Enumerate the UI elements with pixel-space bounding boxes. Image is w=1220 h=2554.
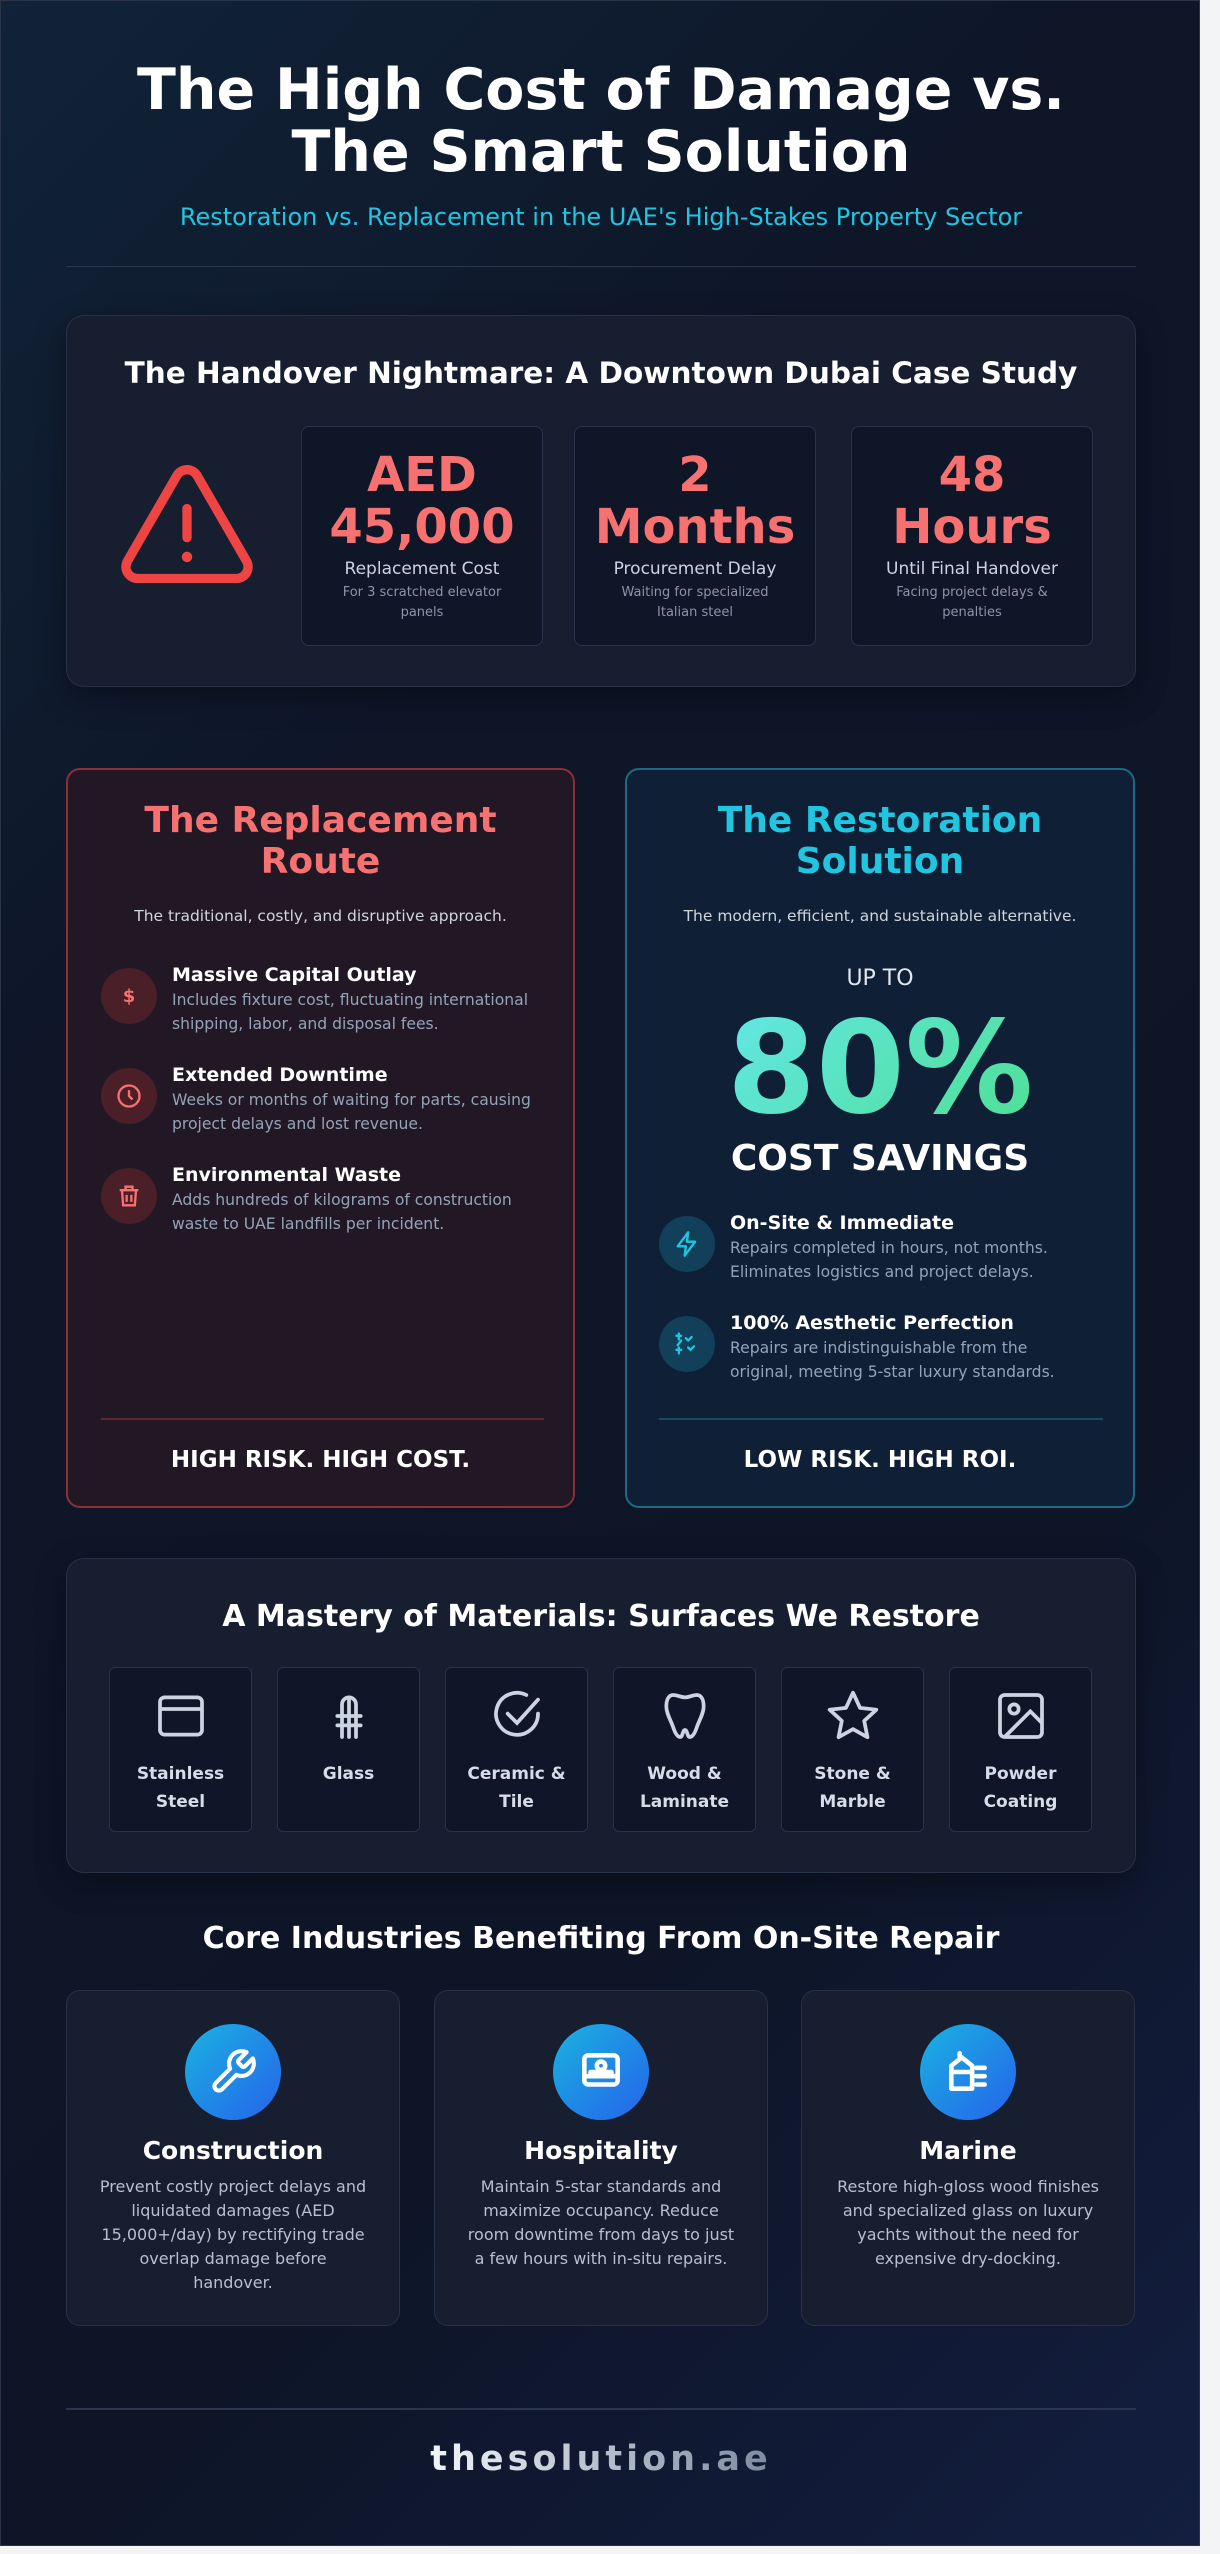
icon: warning: [121, 465, 253, 584]
stat: handover: 48: [939, 447, 1005, 503]
replacement heading: [144, 800, 497, 882]
item: on-site: Repairs completed in hours, not months. Eliminates logistics and project delays.: [730, 1239, 1048, 1281]
replacement footer: HIGH RISK. HIGH COST.: [171, 1447, 470, 1473]
restoration heading: [718, 800, 1042, 882]
panel: restoration solution: [625, 768, 1135, 1508]
stat: delay: 2: [678, 447, 712, 503]
stat: delay: Waiting for specialized Italian steel: [622, 585, 768, 620]
item: aesthetic: [659, 1312, 1055, 1381]
tile: powder coating: Coating: [984, 1792, 1057, 1812]
tile: stainless steel: Steel: [156, 1792, 205, 1812]
tile: stone: Stone &: [814, 1764, 891, 1784]
item: downtime: Extended Downtime: [172, 1064, 388, 1086]
tile: ceramic: [445, 1667, 588, 1832]
up to: UP TO: [846, 966, 914, 991]
stat: 80%: 80%: [727, 994, 1033, 1143]
tile: stone: Marble: [819, 1792, 886, 1812]
title: [137, 57, 1065, 185]
item: capital outlay: Massive Capital Outlay: [172, 964, 417, 986]
restoration heading: Solution: [796, 841, 964, 882]
item: capital outlay: [101, 964, 528, 1033]
card: construction: Construction: [143, 2136, 323, 2165]
item: aesthetic: 100% Aesthetic Perfection: [730, 1312, 1014, 1334]
item: downtime: [101, 1064, 531, 1133]
card: marine: Marine: [919, 2136, 1017, 2165]
panel: materials: [66, 1558, 1136, 1873]
card: marine: [801, 1990, 1135, 2326]
stat: cost: Replacement Cost: [345, 559, 499, 579]
case study heading: The Handover Nightmare: A Downtown Dubai Case Study: [125, 356, 1077, 390]
item: on-site: On-Site & Immediate: [730, 1212, 954, 1234]
item: waste: [101, 1164, 512, 1233]
card: hospitality: Hospitality: [524, 2136, 678, 2165]
stat: handover: Facing project delays & penalties: [896, 585, 1048, 620]
stat: delay: Months: [595, 499, 795, 555]
card: hospitality: [434, 1990, 768, 2326]
tile: wood: Wood &: [647, 1764, 722, 1784]
item: capital outlay: Includes fixture cost, fluctuating international shipping, labor, and disposal fees.: [172, 991, 528, 1033]
item: waste: Adds hundreds of kilograms of construction waste to UAE landfills per incident.: [172, 1191, 512, 1233]
title: The High Cost of Damage vs.: [137, 57, 1065, 123]
title: The Smart Solution: [292, 119, 910, 185]
panel: case study: [66, 315, 1136, 687]
card: marine: Restore high-gloss wood finishes and specialized glass on luxury yachts without the need for expensive dry-docking.: [837, 2177, 1099, 2268]
stat: handover: Hours: [892, 499, 1052, 555]
cost savings: COST SAVINGS: [731, 1138, 1029, 1179]
tile: glass: [277, 1667, 420, 1832]
card: construction: Prevent costly project delays and liquidated damages (AED 15,000+/day) by rectifying trade overlap damage before handover.: [100, 2177, 366, 2292]
card: construction: [66, 1990, 400, 2326]
tile: stainless steel: [109, 1667, 252, 1832]
restoration heading: The Restoration: [718, 800, 1042, 841]
panel: replacement route: [66, 768, 575, 1508]
tile: powder coating: [949, 1667, 1092, 1832]
tile: glass: Glass: [323, 1764, 374, 1784]
replacement heading: Route: [261, 841, 380, 882]
item: on-site: [659, 1212, 1048, 1281]
subtitle: Restoration vs. Replacement in the UAE's High-Stakes Property Sector: [180, 203, 1022, 231]
item: aesthetic: Repairs are indistinguishable from the original, meeting 5-star luxury standards.: [730, 1339, 1055, 1381]
tile: wood: Laminate: [640, 1792, 729, 1812]
replacement heading: The Replacement: [144, 800, 497, 841]
tile: ceramic: Ceramic &: [467, 1764, 566, 1784]
stat: cost: For 3 scratched elevator panels: [343, 585, 501, 620]
stat: handover: Until Final Handover: [886, 559, 1058, 579]
item: capital outlay: $: [123, 986, 135, 1006]
industries heading: Core Industries Benefiting From On-Site Repair: [203, 1921, 999, 1956]
tile: ceramic: Tile: [499, 1792, 534, 1812]
stat: delay: [574, 426, 816, 646]
stat: delay: Procurement Delay: [614, 559, 776, 579]
materials heading: A Mastery of Materials: Surfaces We Restore: [222, 1599, 980, 1634]
item: downtime: Weeks or months of waiting for parts, causing project delays and lost revenue.: [172, 1091, 531, 1133]
stat: cost: [301, 426, 543, 646]
stat: cost: AED: [367, 447, 477, 503]
replacement subtitle: The traditional, costly, and disruptive approach.: [134, 907, 507, 925]
tile: stainless steel: Stainless: [137, 1764, 224, 1784]
item: waste: Environmental Waste: [172, 1164, 401, 1186]
tile: stone: [781, 1667, 924, 1832]
stat: cost: 45,000: [329, 499, 515, 555]
restoration subtitle: The modern, efficient, and sustainable alternative.: [684, 907, 1076, 925]
tile: wood: [613, 1667, 756, 1832]
card: hospitality: Maintain 5-star standards and maximize occupancy. Reduce room downtime from days to just a few hours with in-situ repairs.: [468, 2177, 734, 2268]
footer brand: thesolution.ae: [430, 2439, 772, 2479]
stat: 80%: [627, 996, 1133, 1141]
tile: powder coating: Powder: [985, 1764, 1056, 1784]
restoration footer: LOW RISK. HIGH ROI.: [744, 1447, 1016, 1473]
stat: handover: [851, 426, 1093, 646]
